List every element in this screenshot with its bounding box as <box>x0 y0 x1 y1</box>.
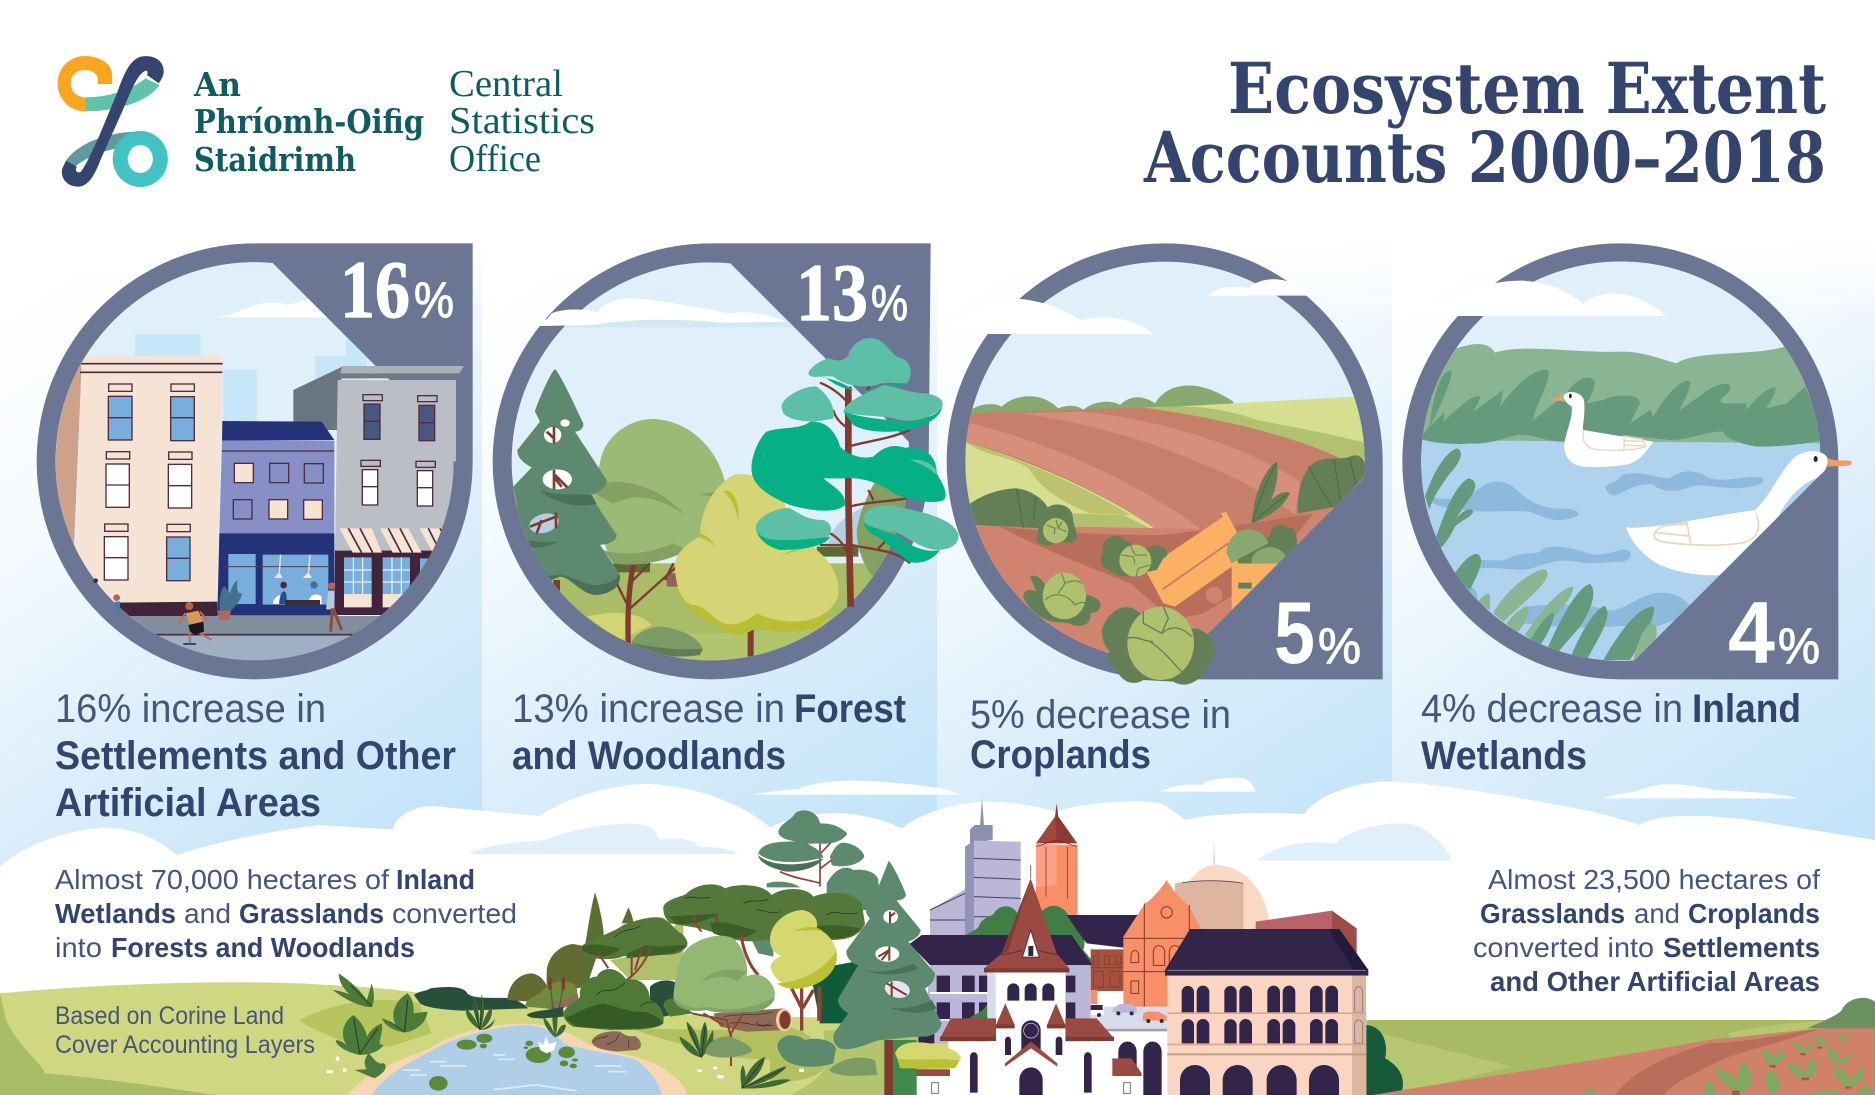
left building <box>923 965 1091 1043</box>
grass and reeds <box>466 994 791 1089</box>
orange gabled building <box>1123 880 1202 1010</box>
green trees <box>966 906 1092 967</box>
caption: wetlands: Inland <box>1692 687 1801 731</box>
ground shading <box>637 1027 827 1082</box>
yellow bush <box>748 630 754 657</box>
water lilies <box>429 1034 578 1091</box>
caption: forest: and Woodlands <box>512 734 786 778</box>
caption: forest: 13% increase in <box>512 687 785 731</box>
text: data source note: Cover Accounting Layers <box>55 1031 315 1059</box>
circular illustration: town street <box>36 243 473 680</box>
text: wetlands and grasslands conversion: into <box>55 932 102 963</box>
text: wetlands and grasslands conversion: Wetlands <box>55 898 176 929</box>
text: grasslands and croplands conversion: converted into <box>1473 932 1654 963</box>
percentage label: 4%: 4 <box>1728 583 1775 682</box>
illustration: town buildings <box>833 798 1368 1095</box>
terrace and cars <box>1091 1007 1167 1028</box>
field on the right <box>1366 998 1875 1095</box>
clouds <box>947 279 1308 334</box>
caption: croplands: 5% decrease in <box>970 693 1231 737</box>
dark backdrop <box>810 960 863 1023</box>
building: cream <box>56 364 82 545</box>
caption: wetlands: Wetlands <box>1421 734 1587 778</box>
fir <box>513 487 620 595</box>
lime tree <box>792 988 813 1031</box>
grass clump at the pond edge <box>355 1053 386 1078</box>
front bushes <box>705 1036 752 1058</box>
seedlings <box>1581 1032 1875 1095</box>
landscape: clouds and ground <box>0 778 1875 1095</box>
circular illustration: fields <box>946 243 1383 685</box>
percentage label: 13%: 13 <box>796 247 868 338</box>
big pink building <box>1165 929 1368 1095</box>
ground left <box>0 973 959 1095</box>
panel: wetlands <box>1402 243 1852 770</box>
panel: forest <box>492 243 958 770</box>
large swan body <box>1626 510 1778 575</box>
percentage label: 5% <box>1274 583 1361 682</box>
logo text: Irish name: Staidrimh <box>194 140 356 179</box>
orange tower <box>1036 844 1077 917</box>
percentage label: 16%: % <box>414 272 454 328</box>
caption: wetlands: 4% decrease in <box>1421 687 1683 731</box>
logo text: Irish name: An <box>193 65 241 104</box>
text: grasslands and croplands conversion: and Other Artificial Areas <box>1490 966 1820 997</box>
text: wetlands and grasslands conversion: Forests and Woodlands <box>111 932 415 963</box>
large swan neck <box>1755 458 1819 520</box>
building: blue <box>222 421 334 441</box>
panel: croplands <box>946 243 1383 776</box>
green round tree <box>692 1013 743 1066</box>
crate <box>1144 512 1280 610</box>
church <box>912 865 1142 1095</box>
icon: logo mark <box>58 56 168 187</box>
round tree trunk <box>628 565 633 645</box>
street <box>130 616 380 635</box>
logo text: English name: Statistics <box>449 100 595 142</box>
logo text: Irish name <box>193 65 424 179</box>
trunks <box>598 917 702 980</box>
logo text: English name: Central <box>449 63 563 105</box>
pond <box>348 1024 687 1095</box>
tall tree on top <box>758 810 880 910</box>
panel: settlements <box>36 243 473 816</box>
round tree <box>590 419 728 558</box>
cloud <box>505 298 787 327</box>
percentage label: 4%: % <box>1778 618 1820 674</box>
percentage label: 4% <box>1728 583 1820 682</box>
boulders <box>592 1031 641 1052</box>
cabbages <box>1036 505 1077 545</box>
title <box>1143 47 1826 199</box>
circular illustration: trees <box>492 243 958 680</box>
text: wetlands and grasslands conversion: Almost 70,000 hectares of <box>55 864 389 895</box>
text: wetlands and grasslands conversion: converted <box>392 898 517 929</box>
large swan head and beak <box>1793 451 1852 476</box>
caption: forest <box>512 687 906 778</box>
text: grasslands and croplands conversion: Almost 23,500 hectares of <box>1488 864 1820 895</box>
illustration: pond and forest <box>348 810 930 1095</box>
canopy mass <box>663 884 865 941</box>
left reeds <box>1425 448 1654 660</box>
maroon block <box>1256 911 1332 930</box>
text: wetlands and grasslands conversion: Inland <box>396 864 475 895</box>
pine tree <box>751 338 958 607</box>
caption: settlements: Settlements and Other <box>55 734 456 778</box>
far hedge and hills <box>414 987 528 1011</box>
leaves <box>968 455 1367 528</box>
text: wetlands and grasslands conversion: Grasslands <box>239 898 384 929</box>
percentage label: 5%: 5 <box>1274 583 1315 682</box>
text: grasslands and croplands conversion: Grasslands <box>1480 898 1625 929</box>
white cloud band, right <box>900 778 1875 1095</box>
text: wetlands and grasslands conversion: and <box>184 898 231 929</box>
logo text: Irish name: Phríomh-Oifig <box>194 102 424 141</box>
mid shrubs <box>650 980 680 1017</box>
text: grasslands and croplands conversion: and <box>1634 898 1680 929</box>
log <box>713 1008 787 1032</box>
cloud <box>1415 281 1666 316</box>
people and plant <box>220 580 242 612</box>
caption: wetlands <box>1421 687 1801 778</box>
panel backgrounds <box>0 240 1875 900</box>
text: grasslands and croplands conversion <box>1473 864 1820 997</box>
logo text: English name: Office <box>449 138 541 180</box>
text: data source note <box>55 1002 315 1059</box>
building: grey <box>293 367 342 430</box>
percentage label: 5%: % <box>1318 618 1361 674</box>
logo: Central Statistics Office <box>58 56 595 187</box>
text: grasslands and croplands conversion: Settlements <box>1663 932 1820 963</box>
back roof <box>1067 915 1143 950</box>
brown block <box>1091 949 1125 991</box>
percentage label: 13%: % <box>871 275 908 331</box>
small swan <box>1563 392 1653 467</box>
cabbage cluster <box>1235 525 1297 563</box>
grass clumps on the left bank <box>333 973 427 1078</box>
text: grasslands and croplands conversion: Croplands <box>1688 898 1820 929</box>
cabbage: foreground <box>1102 607 1215 685</box>
text: wetlands and grasslands conversion <box>55 864 517 963</box>
caption: forest: Forest <box>794 687 906 731</box>
caption: croplands: Croplands <box>970 733 1151 777</box>
caption: settlements <box>55 687 456 825</box>
skyscraper <box>965 798 984 935</box>
fir tree and lime bush in front of town <box>833 861 961 1095</box>
caption: settlements: 16% increase in <box>55 687 326 731</box>
percentage label: 16%: 16 <box>340 244 410 335</box>
white cloud band, left <box>0 781 959 1095</box>
circular illustration: swans on a lake <box>1402 243 1852 680</box>
text: data source note: Based on Corine Land <box>55 1002 284 1030</box>
dome <box>1173 837 1270 930</box>
logo text: English name <box>449 63 595 180</box>
caption: settlements: Artificial Areas <box>55 781 321 825</box>
caption: croplands <box>970 693 1231 777</box>
